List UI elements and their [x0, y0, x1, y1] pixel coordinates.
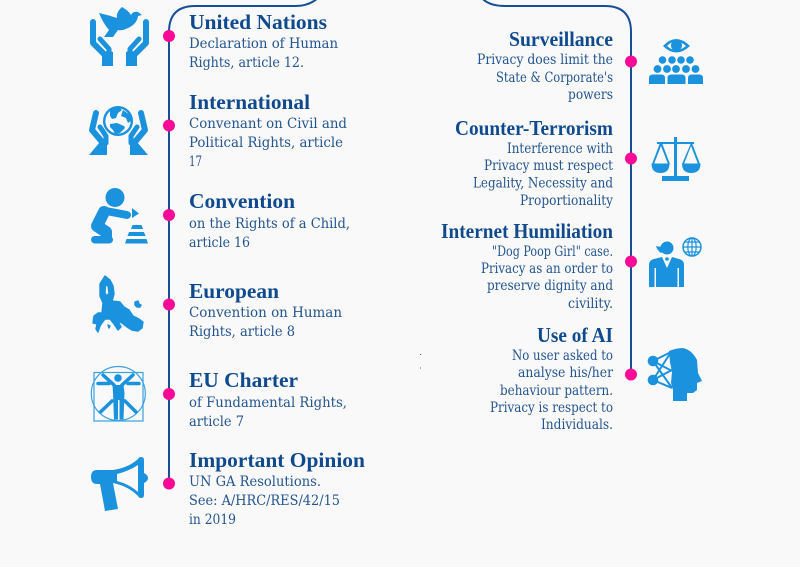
block: European: Convention on Human — [189, 305, 342, 321]
block: International: International — [189, 90, 310, 114]
block: European — [189, 279, 342, 340]
block: Internet Humiliation: preserve dignity and — [487, 278, 613, 294]
block: Counter-Terrorism: Interference with — [507, 141, 613, 157]
block: Convention: on the Rights of a Child, — [189, 216, 350, 232]
block: Counter-Terrorism: Proportionality — [520, 193, 613, 209]
icon: map of Europe — [93, 276, 143, 332]
icon: child with stacking cone — [91, 188, 148, 244]
block: Internet Humiliation — [441, 219, 613, 312]
block: EU Charter: article 7 — [189, 414, 244, 430]
right timeline — [481, 0, 637, 380]
left timeline — [163, 0, 319, 490]
block: Use of AI: Use of AI — [537, 323, 613, 347]
block: EU Charter: of Fundamental Rights, — [189, 395, 347, 411]
block: United Nations: Rights, article 12. — [189, 55, 304, 71]
block: Surveillance: powers — [568, 87, 613, 103]
block: International: Convenant on Civil and — [189, 116, 347, 132]
block: International: Political Rights, article — [189, 135, 343, 151]
block: Use of AI: analyse his/her — [518, 365, 613, 381]
block: Counter-Terrorism: Counter-Terrorism — [455, 116, 613, 140]
block: International — [189, 90, 347, 170]
block: Convention: Convention — [189, 189, 295, 213]
block: International: 17 — [189, 154, 202, 170]
block: Internet Humiliation: Internet Humiliation — [441, 219, 613, 243]
block: Convention — [189, 189, 350, 251]
icon: scales of justice — [652, 137, 700, 181]
block: Important Opinion: See: A/HRC/RES/42/15 — [189, 493, 340, 509]
block: Internet Humiliation: civility. — [568, 296, 613, 312]
center specks — [420, 354, 421, 368]
block: Use of AI: Privacy is respect to — [490, 400, 613, 416]
block: Important Opinion: in 2019 — [189, 512, 236, 528]
block: Use of AI: behaviour pattern. — [500, 383, 613, 399]
block: Surveillance: Privacy does limit the — [477, 52, 613, 68]
block: Important Opinion — [189, 448, 365, 528]
block: United Nations — [189, 10, 338, 71]
block: Convention: article 16 — [189, 235, 250, 251]
block: Counter-Terrorism: Legality, Necessity and — [473, 176, 613, 192]
block: Use of AI: No user asked to — [512, 348, 613, 364]
block: Use of AI — [490, 323, 613, 433]
icon: person with globe — [649, 238, 701, 287]
block: United Nations: United Nations — [189, 10, 327, 34]
block: Surveillance — [477, 27, 613, 103]
block: EU Charter: EU Charter — [189, 368, 298, 392]
block: Important Opinion: Important Opinion — [189, 448, 365, 472]
block: Surveillance: State & Corporate's — [496, 70, 613, 86]
block: United Nations: Declaration of Human — [189, 36, 338, 52]
icon: AI head with neural network — [648, 348, 702, 401]
icon: megaphone — [91, 457, 148, 511]
block: Important Opinion: UN GA Resolutions. — [189, 474, 321, 490]
icon: Vitruvian man — [91, 366, 145, 421]
block: European: European — [189, 279, 279, 303]
block: European: Rights, article 8 — [189, 324, 295, 340]
icon: hands holding globe — [89, 107, 148, 155]
block: Internet Humiliation: "Dog Poop Girl" case. — [492, 244, 613, 260]
icon: hands holding dove — [93, 7, 146, 66]
block: Surveillance: Surveillance — [509, 27, 613, 51]
icon: crowd under surveillance eye — [649, 39, 703, 84]
block: Counter-Terrorism — [455, 116, 613, 209]
block: Use of AI: Individuals. — [541, 417, 613, 433]
block: Internet Humiliation: Privacy as an order to — [481, 261, 613, 277]
block: EU Charter — [189, 368, 347, 430]
block: Counter-Terrorism: Privacy must respect — [484, 158, 613, 174]
